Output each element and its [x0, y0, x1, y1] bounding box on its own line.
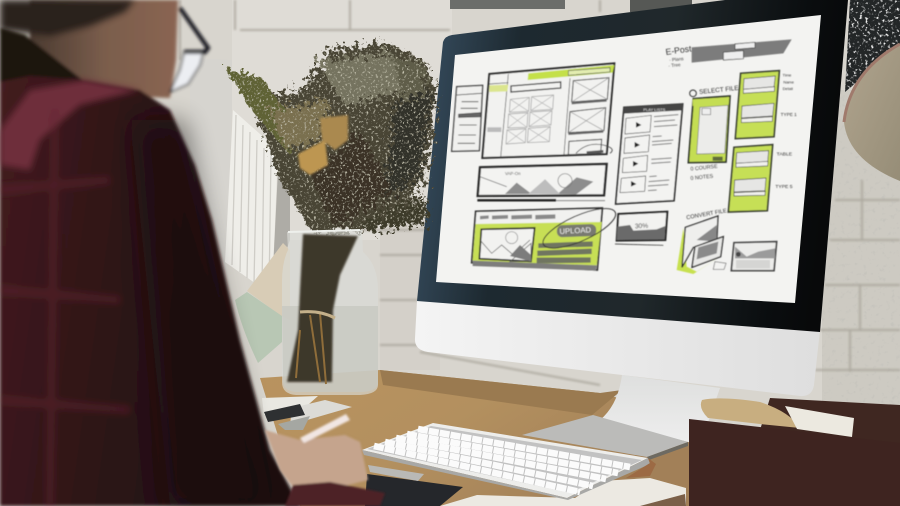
monitor	[415, 0, 848, 396]
lower green card wireframe: TABLE	[777, 151, 793, 157]
monitor chin	[415, 300, 820, 396]
upper green card wireframe: Time	[783, 73, 792, 78]
box front	[689, 419, 900, 506]
upper green card wireframe: TYPE 1	[781, 112, 797, 117]
desk	[260, 370, 700, 506]
storage box with stationery	[689, 398, 900, 506]
red shoulder band	[0, 80, 140, 170]
top wall art strip	[450, 0, 565, 9]
plaid stripes	[0, 110, 130, 506]
hair	[0, 0, 135, 36]
top label: effect and slider: E-Post	[665, 43, 693, 57]
top label: effect and slider: - Tree	[668, 62, 681, 68]
waterline	[282, 306, 378, 392]
rolled paper tube and mint tube	[235, 243, 290, 363]
keys	[367, 426, 642, 493]
monitor stand	[522, 375, 720, 460]
jar body	[282, 230, 378, 395]
dark notebook under hand	[365, 474, 463, 506]
dried flower bouquet	[226, 42, 436, 232]
desk back shadow	[380, 370, 622, 415]
upload banner wireframe: UPLOAD	[559, 225, 592, 236]
white card	[785, 406, 854, 437]
hand, cuff and pen	[265, 414, 385, 506]
select file phone wireframe: 0 COURSE	[690, 164, 718, 173]
select file phone wireframe: SELECT FILE	[699, 85, 739, 96]
silver clip	[368, 465, 424, 481]
lower green card wireframe	[728, 145, 793, 212]
upper green card wireframe: Name	[783, 79, 795, 84]
twine	[300, 312, 335, 318]
person in plaid shirt	[0, 0, 300, 506]
video list wireframe: PLAY LISTS	[643, 107, 666, 112]
box widget wireframe	[615, 212, 667, 245]
stems	[287, 234, 358, 382]
wireless keyboard	[362, 423, 656, 500]
open notebook bottom	[440, 478, 686, 506]
box back wall	[760, 398, 900, 446]
foliage mass	[226, 42, 436, 232]
dark shadow	[130, 120, 265, 506]
convert file wireframe	[677, 208, 728, 274]
select file phone wireframe	[688, 85, 739, 182]
upper green card wireframe: Detail	[783, 86, 793, 91]
upper green card wireframe	[735, 71, 797, 139]
lamp shade	[844, 44, 900, 181]
top label: effect and slider: - Plans	[669, 56, 685, 63]
pale wall panel and ridged lampshade behind the plant	[190, 58, 290, 300]
wireframe sketches	[452, 39, 797, 274]
monitor bezel	[417, 0, 848, 332]
framed picture top right	[845, 0, 900, 92]
wooden blob	[701, 398, 800, 428]
eyeglasses	[170, 8, 208, 92]
box widget wireframe: 30%	[635, 223, 648, 230]
gallery browser wireframe	[482, 63, 614, 158]
dark picture strip above the monitor	[630, 0, 692, 12]
narrow nav panel	[452, 85, 483, 151]
orange dried flower heads	[298, 115, 348, 175]
neck and head skin	[30, 0, 178, 98]
dark collar	[0, 28, 88, 92]
pen	[300, 414, 350, 443]
glass jar with stems	[282, 230, 378, 395]
landscape hero wireframe	[477, 164, 607, 201]
shirt torso	[0, 76, 300, 506]
landscape hero wireframe: VAP-On	[505, 171, 521, 176]
monitor screen	[436, 15, 821, 303]
convert file wireframe: CONVERT FILE	[686, 208, 728, 221]
top label: effect and slider	[665, 39, 792, 68]
papers on desk	[262, 396, 352, 430]
video list wireframe	[616, 104, 683, 204]
upload banner wireframe	[472, 201, 620, 271]
image card wireframe	[731, 242, 777, 271]
cuff	[285, 482, 385, 506]
lower green card wireframe: TYPE 5	[775, 184, 793, 190]
select file phone wireframe: 0 NOTES	[690, 174, 714, 182]
